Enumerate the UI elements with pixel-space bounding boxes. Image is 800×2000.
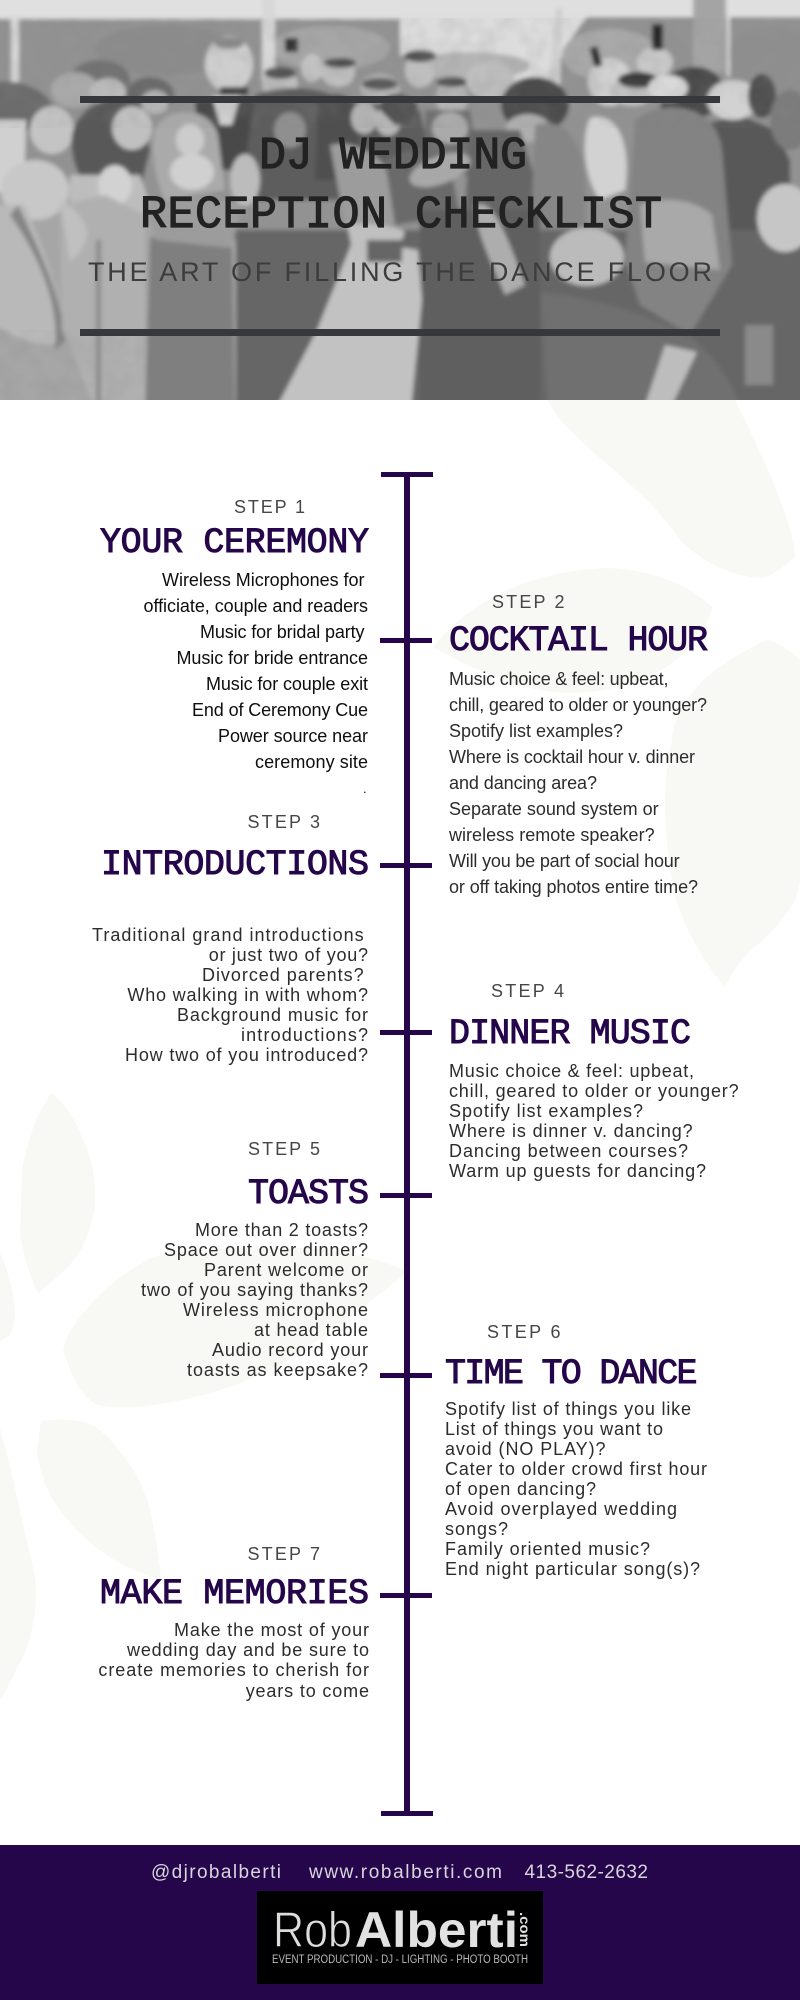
left guests bbox=[0, 194, 238, 400]
step 5: toasts: TOASTS bbox=[248, 1174, 369, 1214]
step 1 checklist: Music for bridal party bbox=[200, 622, 364, 642]
step 2: cocktail hour: COCKTAIL HOUR bbox=[449, 621, 708, 661]
step 1 checklist: officiate, couple and readers bbox=[144, 596, 368, 616]
header top rule bbox=[80, 96, 720, 103]
step 3: introductions: STEP 3 bbox=[248, 812, 320, 832]
step 4 checklist: chill, geared to older or younger? bbox=[449, 1081, 739, 1101]
logo: Rob Alberti bbox=[257, 1891, 543, 1984]
step 5: toasts: STEP 5 bbox=[248, 1139, 320, 1159]
step 6 checklist bbox=[445, 1399, 707, 1579]
step 5 checklist: Wireless microphone bbox=[183, 1300, 368, 1320]
title bbox=[140, 131, 662, 241]
step 1 checklist: . bbox=[363, 781, 367, 796]
step 1 checklist: Wireless Microphones for bbox=[162, 570, 364, 590]
sky gap and tent roof bbox=[397, 15, 588, 85]
timeline bbox=[380, 472, 433, 1816]
step 7: make memories: STEP 7 bbox=[248, 1544, 320, 1564]
step 7 text: years to come bbox=[246, 1681, 369, 1701]
step 7 text: wedding day and be sure to bbox=[126, 1640, 369, 1660]
logo: Rob Alberti: EVENT PRODUCTION - DJ - LIGHTING - PHOTO BOOTH bbox=[272, 1954, 528, 1966]
step 7 text: Make the most of your bbox=[174, 1620, 369, 1640]
step 6 checklist: avoid (NO PLAY)? bbox=[445, 1439, 606, 1459]
dark base of the lower photo bbox=[233, 228, 800, 400]
step 2 checklist: wireless remote speaker? bbox=[448, 825, 655, 845]
step 3 checklist: How two of you introduced? bbox=[125, 1045, 368, 1065]
step 2 checklist: Will you be part of social hour bbox=[449, 851, 680, 871]
header photo: wedding crowd applauding the couple bbox=[0, 0, 800, 420]
step 3: introductions bbox=[92, 812, 369, 1065]
step 2 checklist: Separate sound system or bbox=[449, 799, 659, 819]
step 4 checklist: Warm up guests for dancing? bbox=[449, 1161, 706, 1181]
step 3 checklist bbox=[92, 925, 368, 1065]
step 2: cocktail hour bbox=[448, 592, 708, 897]
step 1: your ceremony bbox=[100, 497, 369, 796]
middle crowd bbox=[240, 88, 440, 200]
step 3 checklist: introductions? bbox=[241, 1025, 368, 1045]
step 2 checklist: Music choice & feel: upbeat, bbox=[449, 669, 668, 689]
step 3 checklist: Traditional grand introductions bbox=[92, 925, 364, 945]
step 1 checklist: Music for bride entrance bbox=[176, 648, 368, 668]
step 3 checklist: Who walking in with whom? bbox=[127, 985, 368, 1005]
step 4 checklist: Where is dinner v. dancing? bbox=[449, 1121, 693, 1141]
step 5 checklist: toasts as keepsake? bbox=[187, 1360, 368, 1380]
step 6 checklist: Cater to older crowd first hour bbox=[445, 1459, 707, 1479]
back row of guests bbox=[74, 59, 131, 89]
step 5 checklist: More than 2 toasts? bbox=[195, 1220, 368, 1240]
step 2 checklist bbox=[448, 669, 707, 897]
footer contact details: www.robalberti.com bbox=[308, 1862, 502, 1883]
bride and groom bbox=[315, 94, 362, 180]
step 1 checklist: ceremony site bbox=[255, 752, 368, 772]
step 1: your ceremony: STEP 1 bbox=[234, 497, 305, 517]
title: RECEPTION CHECKLIST bbox=[140, 190, 662, 241]
step 6 checklist: of open dancing? bbox=[445, 1479, 596, 1499]
step 3 checklist: Background music for bbox=[177, 1005, 368, 1025]
step 7 text bbox=[98, 1620, 369, 1701]
mottled photographic texture bbox=[12, 18, 730, 128]
step 4: dinner music bbox=[449, 981, 739, 1181]
step 4 checklist: Dancing between courses? bbox=[449, 1141, 688, 1161]
tent poles bbox=[693, 0, 726, 72]
step 2 checklist: and dancing area? bbox=[449, 773, 597, 793]
step 6 checklist: List of things you want to bbox=[445, 1419, 663, 1439]
step 1 checklist bbox=[144, 570, 368, 796]
step 6 checklist: End night particular song(s)? bbox=[445, 1559, 700, 1579]
step 5 checklist: Audio record your bbox=[212, 1340, 368, 1360]
logo: Rob Alberti: .com bbox=[517, 1912, 533, 1947]
step 1 checklist: Music for couple exit bbox=[206, 674, 368, 694]
step 5 checklist bbox=[141, 1220, 368, 1380]
step 7 text: create memories to cherish for bbox=[98, 1660, 369, 1680]
step 1 checklist: End of Ceremony Cue bbox=[192, 700, 368, 720]
logo: Rob Alberti: Rob bbox=[273, 1902, 352, 1958]
step 2 checklist: or off taking photos entire time? bbox=[449, 877, 698, 897]
step 3: introductions: INTRODUCTIONS bbox=[101, 845, 369, 885]
step 5 checklist: Parent welcome or bbox=[204, 1260, 368, 1280]
step 6 checklist: Family oriented music? bbox=[445, 1539, 650, 1559]
footer contact details: 413-562-2632 bbox=[524, 1862, 648, 1883]
footer contact details bbox=[151, 1862, 648, 1883]
step 6 checklist: Avoid overplayed wedding bbox=[445, 1499, 677, 1519]
step 7: make memories: MAKE MEMORIES bbox=[100, 1574, 369, 1614]
step 4 checklist: Music choice & feel: upbeat, bbox=[449, 1061, 694, 1081]
step 4 checklist: Spotify list examples? bbox=[449, 1101, 643, 1121]
step 6: time to dance: TIME TO DANCE bbox=[445, 1354, 698, 1394]
subtitle: THE ART OF FILLING THE DANCE FLOOR bbox=[88, 257, 712, 287]
step 4: dinner music: DINNER MUSIC bbox=[449, 1014, 691, 1054]
step 1: your ceremony: YOUR CEREMONY bbox=[100, 523, 369, 563]
title: DJ WEDDING bbox=[259, 131, 527, 182]
header bottom rule bbox=[80, 329, 720, 336]
step 4 checklist bbox=[449, 1061, 739, 1181]
step 2: cocktail hour: STEP 2 bbox=[492, 592, 564, 612]
step 5: toasts bbox=[141, 1139, 369, 1380]
background leaves bbox=[0, 400, 800, 1700]
right guests bbox=[475, 204, 525, 295]
footer contact details: @djrobalberti bbox=[151, 1862, 281, 1883]
step 7: make memories bbox=[98, 1544, 369, 1701]
step 2 checklist: Where is cocktail hour v. dinner bbox=[449, 747, 695, 767]
step 1 checklist: Power source near bbox=[218, 726, 368, 746]
step 3 checklist: Divorced parents? bbox=[202, 965, 364, 985]
step 6: time to dance: STEP 6 bbox=[487, 1322, 560, 1342]
step 5 checklist: two of you saying thanks? bbox=[141, 1280, 368, 1300]
step 6 checklist: songs? bbox=[445, 1519, 508, 1539]
footer band bbox=[0, 1845, 800, 2000]
logo: Rob Alberti: Alberti bbox=[355, 1902, 518, 1958]
bride's dress bbox=[277, 244, 425, 400]
step 4: dinner music: STEP 4 bbox=[491, 981, 564, 1001]
step 5 checklist: Space out over dinner? bbox=[164, 1240, 368, 1260]
step 2 checklist: Spotify list examples? bbox=[449, 721, 623, 741]
step 6: time to dance bbox=[445, 1322, 707, 1579]
step 3 checklist: or just two of you? bbox=[209, 945, 368, 965]
step 5 checklist: at head table bbox=[254, 1320, 368, 1340]
step 2 checklist: chill, geared to older or younger? bbox=[449, 695, 707, 715]
step 6 checklist: Spotify list of things you like bbox=[445, 1399, 691, 1419]
